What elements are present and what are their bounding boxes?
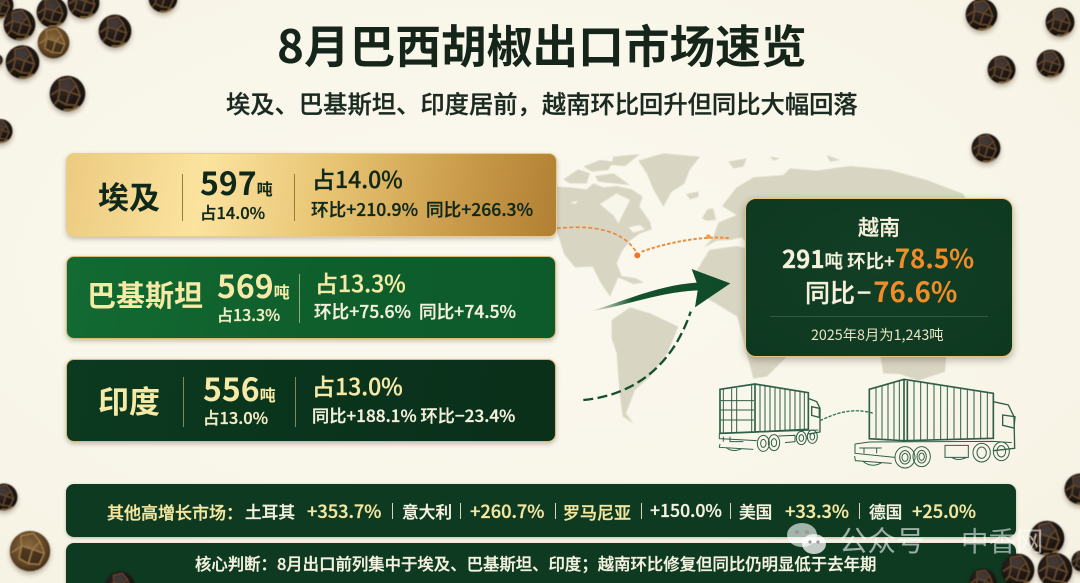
separator — [770, 316, 988, 317]
Vietnam tonnage and month-on-month: 291吨 环比+78.5% — [782, 239, 974, 276]
divider — [295, 377, 296, 427]
australia — [880, 353, 947, 381]
greenland — [638, 153, 700, 207]
europe and asia — [704, 166, 970, 250]
caribbean — [593, 268, 633, 283]
south america — [612, 307, 678, 423]
Vietnam note: 2025年8月为1,243吨 — [811, 324, 944, 345]
panel: Egypt — [66, 153, 557, 237]
Germany value: +25.0% — [912, 498, 976, 524]
watermark text: name: 中香网 — [961, 519, 1044, 559]
Italy: 意大利 — [402, 499, 452, 523]
Egypt share small: 占14.0% — [200, 200, 265, 224]
truck right — [855, 379, 1015, 468]
truck left — [719, 384, 820, 451]
watermark — [787, 519, 1044, 560]
label: 其他高增长市场： — [107, 499, 243, 524]
divider — [183, 377, 184, 427]
watermark text: account: 公众号 — [839, 519, 925, 560]
band: other high-growth markets — [66, 484, 1016, 537]
Romania: 罗马尼亚 — [563, 499, 631, 524]
wechat icon — [787, 523, 826, 554]
Italy value: +260.7% — [470, 498, 544, 524]
north america — [557, 183, 652, 297]
India name: 印度 — [98, 377, 160, 422]
separator — [555, 503, 556, 519]
Pakistan share large: 占13.3% — [315, 265, 406, 299]
band: core judgement — [66, 543, 1016, 583]
Vietnam year-on-year: 同比−76.6% — [805, 270, 957, 310]
Vietnam name: 越南 — [858, 212, 900, 242]
iceland — [686, 192, 699, 199]
judgement text: 核心判断：8月出口前列集中于埃及、巴基斯坦、印度；越南环比修复但同比仍明显低于去年期 — [195, 551, 876, 575]
panel: Vietnam callout — [745, 198, 1013, 357]
british isles — [702, 208, 716, 221]
divider — [299, 274, 300, 323]
USA: 美国 — [739, 499, 772, 523]
Turkey value: +353.7% — [307, 498, 381, 524]
Egypt tonnage: 597吨 — [200, 159, 273, 205]
subtitle: 埃及、巴基斯坦、印度居前，越南环比回升但同比大幅回落 — [226, 85, 858, 120]
Germany: 德国 — [869, 499, 902, 523]
Romania value: +150.0% — [650, 498, 722, 523]
separator — [460, 503, 461, 519]
Turkey: 土耳其 — [245, 499, 295, 523]
panel: Pakistan — [66, 256, 556, 339]
Egypt share large: 占14.0% — [312, 161, 403, 195]
Pakistan tonnage: 569吨 — [217, 262, 290, 308]
USA value: +33.3% — [785, 498, 849, 524]
separator — [730, 503, 731, 519]
arctic islands — [563, 154, 640, 185]
panel: India — [66, 359, 556, 442]
India share large: 占13.0% — [312, 368, 403, 402]
India change rates: 同比+188.1% 环比−23.4% — [312, 402, 515, 427]
separator — [392, 503, 393, 519]
divider — [182, 174, 183, 221]
Egypt name: 埃及 — [98, 173, 160, 218]
divider — [294, 174, 295, 221]
svalbard and arctic islands — [728, 155, 840, 168]
India share small: 占13.0% — [203, 405, 268, 429]
Egypt change rates: 环比+210.9% 同比+266.3% — [311, 197, 533, 222]
separator — [859, 503, 860, 519]
India tonnage: 556吨 — [203, 365, 276, 411]
africa — [697, 246, 790, 378]
title: 8月巴西胡椒出口市场速览 — [277, 11, 807, 77]
map lakes — [570, 193, 645, 233]
Pakistan name: 巴基斯坦 — [87, 273, 203, 315]
Pakistan share small: 占13.3% — [217, 302, 280, 326]
Pakistan change rates: 环比+75.6% 同比+74.5% — [314, 299, 516, 324]
separator — [641, 503, 642, 519]
